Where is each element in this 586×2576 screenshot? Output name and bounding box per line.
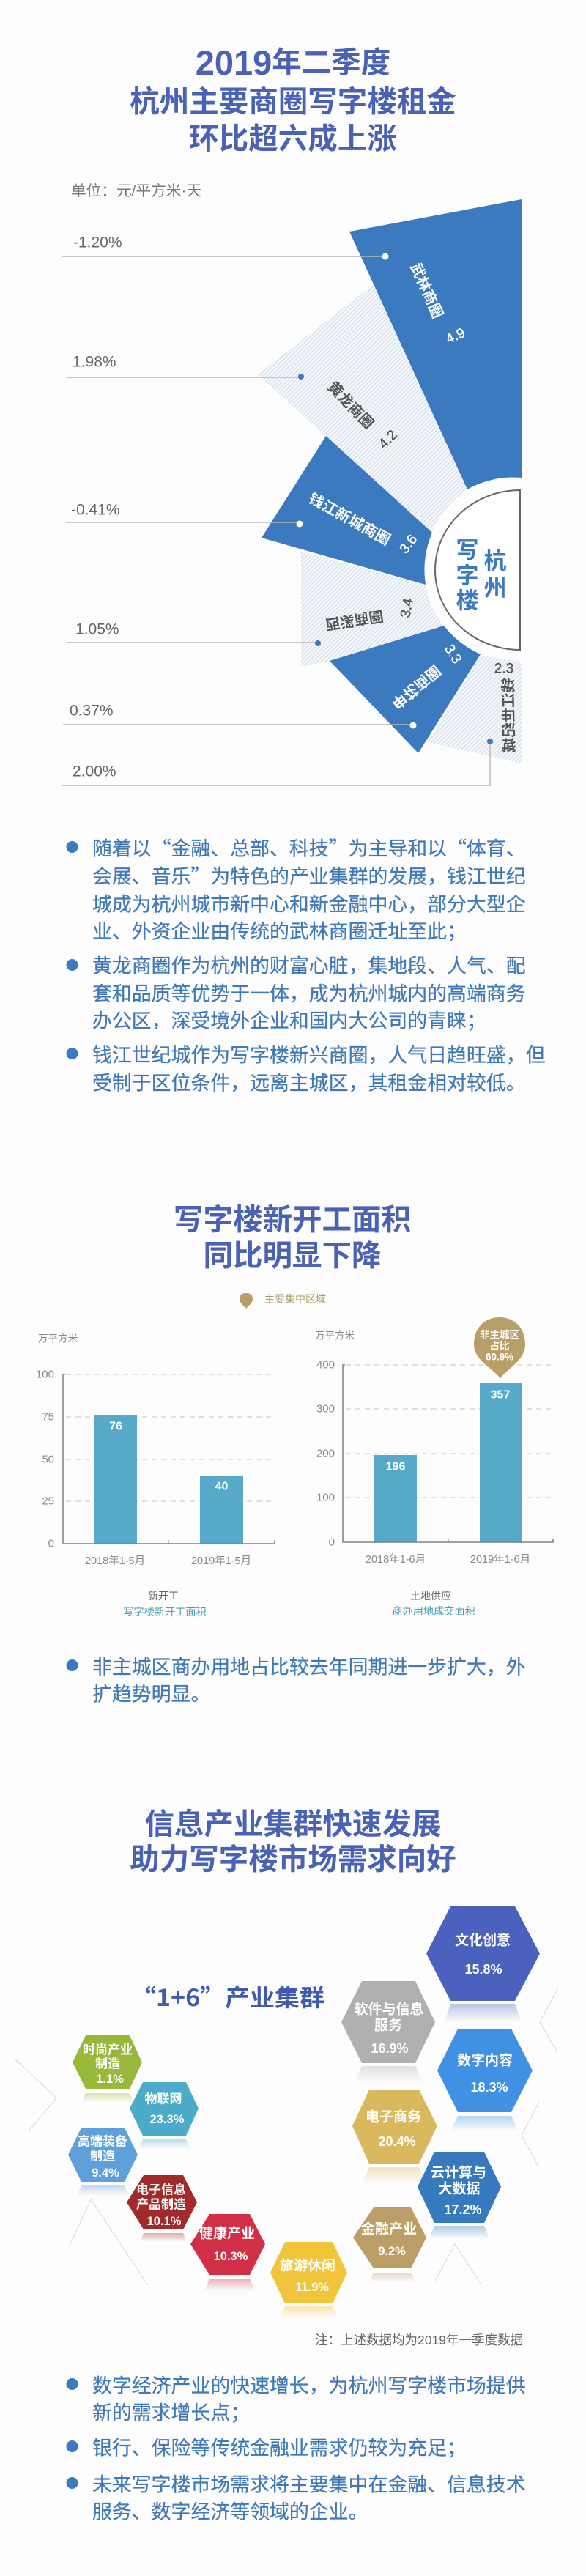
hexagon: internet of things — [130, 2082, 199, 2149]
bullet list: rent commentary: 钱江世纪城作为写字楼新兴商圈，人气日趋旺盛，但 — [92, 1039, 545, 1068]
bar chart: land supply: 400 — [316, 1358, 335, 1372]
hexagon: electronic information products: 电子信息 — [136, 2182, 186, 2196]
bullet list: rent commentary: 城成为杭州城市新中心和新金融中心，部分大型企 — [92, 888, 526, 917]
bar chart: land supply: 200 — [316, 1448, 335, 1459]
bullet list: rent commentary — [66, 832, 545, 1096]
title: rent section: 2019年二季度 — [196, 42, 390, 82]
bar chart: land supply — [315, 1317, 553, 1618]
hexagon: culture and creativity — [426, 1906, 540, 2022]
bullet list: rent commentary: 办公区，深受境外企业和国内大公司的青睐； — [92, 1005, 486, 1033]
legend: main concentration area: 主要集中区域 — [264, 1293, 326, 1305]
bar chart: new construction area: 2019年1-5月 — [191, 1555, 251, 1567]
bar: 2018 Jan-Jun — [374, 1455, 417, 1542]
sector: Qianjiang Century City: 钱江世纪城 — [497, 678, 519, 752]
title: industry cluster section: 助力写字楼市场需求向好 — [130, 1835, 456, 1879]
title: new construction section — [174, 1196, 411, 1275]
hexagon: digital content: 数字内容 — [457, 2051, 513, 2069]
bar: 2019 Jan-Jun: 357 — [491, 1389, 510, 1401]
hexagon: tourism and leisure: 11.9% — [295, 2281, 329, 2294]
bullet list: rent commentary: 会展、音乐”为特色的产业集群的发展，钱江世纪 — [92, 860, 526, 889]
bullet: land supply commentary: 非主城区商办用地占比较去年同期进一步扩大，外 — [92, 1651, 526, 1679]
change label: Qianjiang New City: -0.41% — [71, 501, 120, 519]
change label: Xixi: 1.05% — [75, 621, 119, 637]
bar chart: new construction area: 50 — [42, 1454, 54, 1465]
change label: Shenhua: 0.37% — [70, 702, 114, 719]
change label: Huanglong: 1.98% — [73, 353, 116, 371]
hexagon: high-end equipment manufacturing — [68, 2128, 138, 2196]
hexagon: finance: 金融产业 — [361, 2220, 417, 2238]
bar chart: land supply: 2018年1-6月 — [366, 1553, 426, 1566]
center badge: Hangzhou office buildings: 杭 — [483, 542, 507, 576]
title: rent section: 杭州主要商圈写字楼租金 — [130, 78, 456, 120]
unit label: 单位：元/平方米·天 — [71, 182, 201, 199]
sector: Qianjiang New City: 3.6 — [397, 532, 420, 557]
sector: Qianjiang New City — [262, 436, 432, 585]
hexagon: software and information services: 16.9% — [371, 2041, 409, 2056]
bar chart: new construction area: 75 — [42, 1411, 54, 1423]
title: rent section: 环比超六成上涨 — [189, 114, 397, 158]
bar chart: land supply: 土地供应 — [410, 1590, 451, 1602]
hexagon: internet of things: 物联网 — [145, 2092, 182, 2106]
bullet list: demand commentary: 数字经济产业的快速增长，为杭州写字楼市场提供 — [92, 2369, 526, 2399]
change label: Xixi — [67, 621, 321, 646]
hexagon: tourism and leisure: 旅游休闲 — [280, 2257, 335, 2274]
footnote: 注：上述数据均为2019年一季度数据 — [315, 2333, 523, 2347]
change label: Qianjiang New City — [66, 501, 303, 528]
bullet list: rent commentary: 黄龙商圈作为杭州的财富心脏，集地段、人气、配 — [92, 950, 526, 979]
bar chart: land supply: 商办用地成交面积 — [392, 1605, 475, 1618]
bar chart: new construction area: 25 — [42, 1495, 54, 1508]
title: industry cluster section — [130, 1799, 456, 1879]
hexagon: high-end equipment manufacturing: 9.4% — [92, 2166, 119, 2180]
callout pin: non-core share — [474, 1317, 525, 1379]
center badge: Hangzhou office buildings: 楼 — [456, 582, 479, 615]
title: new construction section: 同比明显下降 — [204, 1231, 381, 1275]
change label: Qianjiang Century City: 2.00% — [73, 763, 116, 780]
center badge: Hangzhou office buildings — [435, 490, 520, 650]
bar: 2018 Jan-Jun: 196 — [386, 1461, 405, 1473]
hexagon: digital content: 18.3% — [470, 2080, 508, 2095]
legend: main concentration area — [240, 1293, 326, 1309]
hexagon: e-commerce: 电子商务 — [366, 2109, 421, 2125]
hexagon: fashion industry manufacturing: 时尚产业 — [83, 2043, 133, 2057]
decorative chevrons — [15, 1988, 558, 2285]
bar chart: new construction area: 2018年1-5月 — [85, 1555, 145, 1567]
sector: Shenhua: 申花商圈 — [387, 661, 446, 715]
hexagon: tourism and leisure — [270, 2242, 347, 2319]
bar chart: land supply: 0 — [329, 1536, 335, 1549]
hexagon: cloud computing and big data: 大数据 — [438, 2180, 481, 2196]
hexagon: fashion industry manufacturing: 1.1% — [96, 2073, 124, 2086]
hexagon: cloud computing and big data: 17.2% — [444, 2202, 482, 2217]
callout pin: non-core share: 占比 — [489, 1339, 510, 1351]
bullet list: demand commentary: 服务、数字经济等领域的企业。 — [92, 2495, 368, 2525]
hexagon: cloud computing and big data — [418, 2152, 501, 2239]
fan chart: rents by business district — [62, 199, 522, 785]
bar chart: new construction area: 0 — [48, 1537, 54, 1550]
bar: 2019 Jan-May: 40 — [215, 1480, 229, 1493]
bar: 2019 Jan-May — [200, 1476, 243, 1544]
sector: Xixi — [301, 552, 443, 667]
hexagon: high-end equipment manufacturing: 高端装备 — [78, 2133, 127, 2148]
bar chart: new construction area: 万平方米 — [38, 1333, 78, 1344]
center badge: Hangzhou office buildings: 州 — [483, 570, 507, 602]
bullet: land supply commentary — [66, 1651, 526, 1707]
bar chart: new construction area: 写字楼新开工面积 — [123, 1607, 207, 1618]
sector: Huanglong: 4.2 — [376, 427, 401, 452]
sector: Shenhua — [330, 626, 481, 753]
heading: 1+6 industry cluster: “1+6”产业集群 — [131, 1980, 324, 2013]
bullet list: rent commentary: 受制于区位条件，远离主城区，其租金相对较低。 — [92, 1067, 526, 1096]
hexagon: culture and creativity: 文化创意 — [455, 1931, 511, 1949]
bullet list: rent commentary: 业、外资企业由传统的武林商圈迁址至此； — [92, 916, 467, 944]
sector: Xixi: 西溪商圈 — [324, 606, 385, 637]
bar chart: new construction area — [36, 1333, 275, 1618]
bar: 2019 Jan-Jun — [480, 1383, 522, 1542]
hexagon: cloud computing and big data: 云计算与 — [431, 2164, 486, 2180]
bullet: land supply commentary: 扩趋势明显。 — [92, 1678, 210, 1707]
change label: Qianjiang Century City — [62, 739, 493, 785]
sector: Qianjiang Century City — [428, 656, 522, 763]
hexagon: electronic information products: 产品制造 — [136, 2198, 186, 2211]
bar chart: land supply: 万平方米 — [315, 1330, 355, 1341]
hexagon: internet of things: 23.3% — [150, 2113, 185, 2126]
change label: Shenhua — [63, 702, 416, 728]
hexagon: software and information services: 软件与信息 — [354, 2000, 424, 2018]
sector: Huanglong: 黄龙商圈 — [324, 376, 379, 433]
hexagon: finance: 9.2% — [378, 2245, 406, 2258]
center badge: Hangzhou office buildings: 字 — [456, 557, 479, 591]
hexagon: culture and creativity: 15.8% — [464, 1962, 502, 1977]
hexagon: fashion industry manufacturing: 制造 — [95, 2057, 120, 2070]
hexagon: software and information services: 服务 — [374, 2018, 402, 2034]
hexagon: software and information services — [341, 1981, 435, 2083]
hexagon: electronic information products — [127, 2175, 197, 2242]
hexagon: e-commerce — [352, 2090, 437, 2184]
hexagon: electronic information products: 10.1% — [147, 2215, 182, 2228]
sector: Huanglong — [258, 284, 467, 533]
hexagon: fashion industry manufacturing — [73, 2035, 142, 2103]
hexagon: health industry — [190, 2214, 265, 2291]
bullet list: demand commentary — [66, 2369, 526, 2525]
hexagon: digital content — [437, 2029, 533, 2131]
sector: Wulin — [349, 199, 522, 489]
callout pin: non-core share: 非主城区 — [480, 1329, 519, 1341]
bullet list: rent commentary: 套和品质等优势于一体，成为杭州城内的高端商务 — [92, 977, 526, 1007]
bar chart: land supply: 300 — [316, 1402, 335, 1415]
callout pin: non-core share: 60.9% — [486, 1351, 513, 1363]
bar: 2018 Jan-May: 76 — [109, 1420, 122, 1433]
hexagon: finance — [353, 2207, 426, 2282]
sector: Wulin: 4.9 — [444, 325, 467, 347]
center badge: Hangzhou office buildings: 写 — [456, 532, 479, 564]
sector: Qianjiang Century City: 2.3 — [494, 661, 513, 677]
bar chart: land supply: 2019年1-6月 — [470, 1553, 530, 1566]
sector: Shenhua: 3.3 — [441, 642, 464, 667]
bullet list: demand commentary: 新的需求增长点； — [92, 2397, 250, 2425]
bar chart: new construction area: 100 — [36, 1369, 54, 1380]
bullet list: demand commentary: 未来写字楼市场需求将主要集中在金融、信息技术 — [92, 2469, 526, 2497]
sector: Xixi: 3.4 — [398, 597, 417, 619]
title: new construction section: 写字楼新开工面积 — [174, 1196, 411, 1238]
hexagon: high-end equipment manufacturing: 制造 — [90, 2150, 115, 2163]
change label: Huanglong — [66, 353, 304, 380]
hexagon: health industry: 健康产业 — [199, 2224, 255, 2242]
bar chart: land supply: 100 — [316, 1492, 335, 1503]
bar chart: new construction area: 新开工 — [148, 1590, 179, 1602]
bullet list: rent commentary: 随着以“金融、总部、科技”为主导和以“体育、 — [92, 832, 526, 862]
hexagon: health industry: 10.3% — [214, 2250, 248, 2263]
bar: 2018 Jan-May — [94, 1415, 137, 1544]
change label: Wulin — [62, 234, 388, 259]
sector: Wulin: 武林商圈 — [406, 259, 450, 321]
hexagon: e-commerce: 20.4% — [378, 2134, 416, 2149]
bullet list: demand commentary: 银行、保险等传统金融业需求仍较为充足； — [92, 2432, 467, 2460]
title: rent section — [130, 42, 456, 158]
sector: Qianjiang New City: 钱江新城商圈 — [305, 486, 395, 549]
title: industry cluster section: 信息产业集群快速发展 — [145, 1799, 441, 1843]
change label: Wulin: -1.20% — [73, 234, 122, 251]
